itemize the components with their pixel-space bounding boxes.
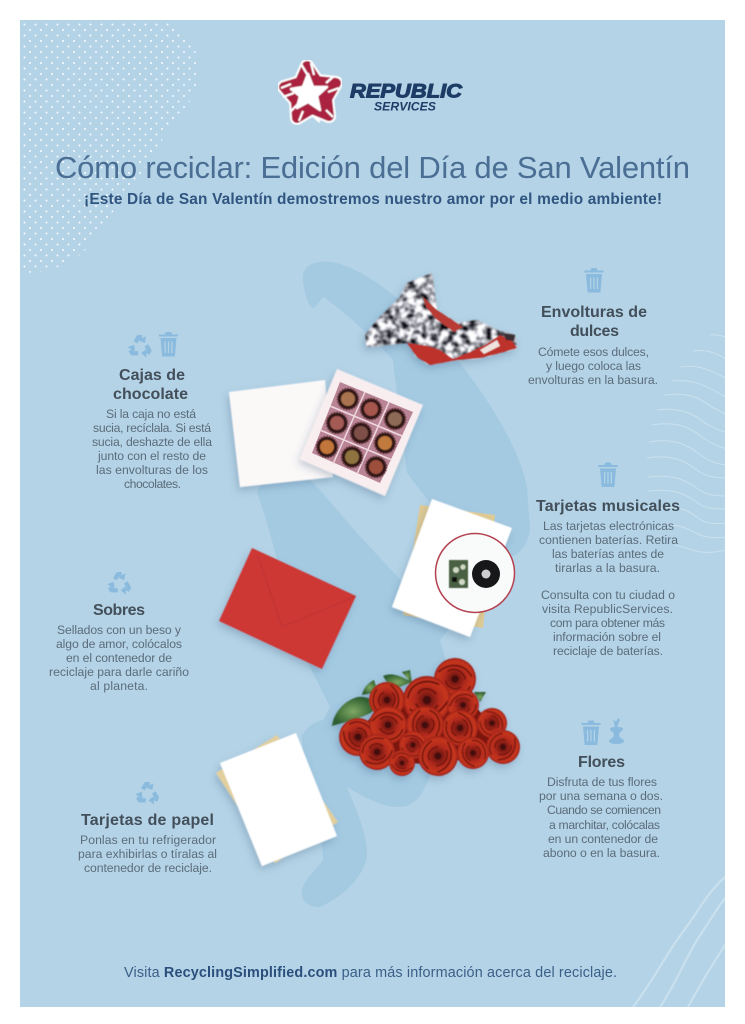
logo wordmark: REPUBLIC [350,82,462,102]
speaker [472,560,500,588]
item: Flores [539,718,663,860]
heading: Tarjetas musicales [536,498,680,515]
body text: sucia, recíclala. Si está [93,421,211,435]
rose blooms [334,649,525,784]
chocolate box lid photo [229,380,333,487]
item: Sobres [49,573,189,693]
subtitle: ¡Este Día de San Valentín demostremos nuestro amor por el medio ambiente! [84,191,662,208]
logo star [281,63,339,122]
body text: algo de amor, colócalos [56,637,182,651]
decorative corner curves [633,877,725,1007]
icon: trash bin [598,462,618,487]
body text: chocolates. [124,477,181,491]
icon: trash bin [581,720,601,745]
heading: Tarjetas de papel [81,812,214,829]
body text: Cuando se comiencen [547,803,661,817]
body text [92,407,212,491]
icon: trash bin [159,332,178,356]
body text [539,519,678,658]
heading [541,304,647,340]
body text: envolturas en la basura. [528,373,658,387]
paper card photo [216,733,338,866]
body text: Las tarjetas electrónicas [543,519,674,533]
body text: com para obtener más [550,616,665,630]
item: Cajas de chocolate [92,332,212,491]
icon: apple core [609,718,624,744]
icon: recycle [107,573,131,595]
musical card photo [392,499,514,637]
battery callout circle [436,534,514,612]
decorative wave lines [647,335,732,552]
body text: Ponlas en tu refrigerador [80,833,216,847]
ribbon heart shape [257,262,530,907]
bouquet base [352,680,500,765]
heading: Envolturas de [541,304,647,321]
body text: Si la caja no está [106,407,196,421]
body text: al planeta. [90,679,148,693]
heading: Flores [578,754,625,771]
body text: información sobre el [553,630,661,644]
body text: Sellados con un beso y [57,623,182,637]
item: Envolturas de dulces [528,268,658,387]
body text: Consulta con tu ciudad o [541,588,675,602]
body text: abono o en la basura. [543,846,660,860]
item: Tarjetas de papel [78,783,217,875]
logo sub-wordmark: SERVICES [374,102,436,114]
body text: para exhibirlas o tíralas al [78,847,217,861]
heading: chocolate [113,386,188,403]
body text: contienen baterías. Retira [539,533,678,547]
body text: visita RepublicServices. [542,602,673,616]
logo: Republic Services [281,63,462,122]
box tray [312,382,413,483]
item: Tarjetas musicales [536,462,680,658]
body text: Disfruta de tus flores [547,775,657,789]
title: Cómo reciclar: Edición del Día de San Valentín [55,150,690,185]
decorative dot pattern [24,24,196,272]
body text: a marchitar, colócalas [549,818,660,832]
red envelope photo [219,548,356,669]
body text [539,775,663,860]
body text: tirarlas a la basura. [555,561,660,575]
body text: en el contenedor de [66,651,172,665]
icon: recycle [128,336,152,358]
body text: junto con el resto de [97,449,206,463]
body text: en un contenedor de [548,832,658,846]
box frame [300,369,423,496]
body text: Cómete esos dulces, [538,345,649,359]
body text [49,623,189,693]
roses bouquet photo [332,649,525,784]
circuit board [449,560,468,588]
body text [78,833,217,875]
chocolates [317,389,405,477]
heading [113,367,188,403]
body text: y luego coloca las [546,359,641,373]
body text: reciclaje de baterías. [553,644,663,658]
heading: dulces [570,323,619,340]
body text: las baterías antes de [552,547,664,561]
heading: Cajas de [119,367,185,384]
body text: por una semana o dos. [539,789,663,803]
body text [528,345,658,387]
footer: Visita RecyclingSimplified.com para más información acerca del reciclaje. [124,965,617,981]
icon: trash bin [584,268,604,292]
body text: contenedor de reciclaje. [84,861,212,875]
icon: recycle [135,783,159,805]
candy wrapper photo [365,273,517,365]
body text: sucia, deshazte de ella [92,435,212,449]
chocolate box photo [300,369,423,496]
body text: reciclaje para darle cariño [49,665,189,679]
heading: Sobres [93,602,145,619]
body text: las envolturas de los [96,463,208,477]
leaves [332,670,486,726]
